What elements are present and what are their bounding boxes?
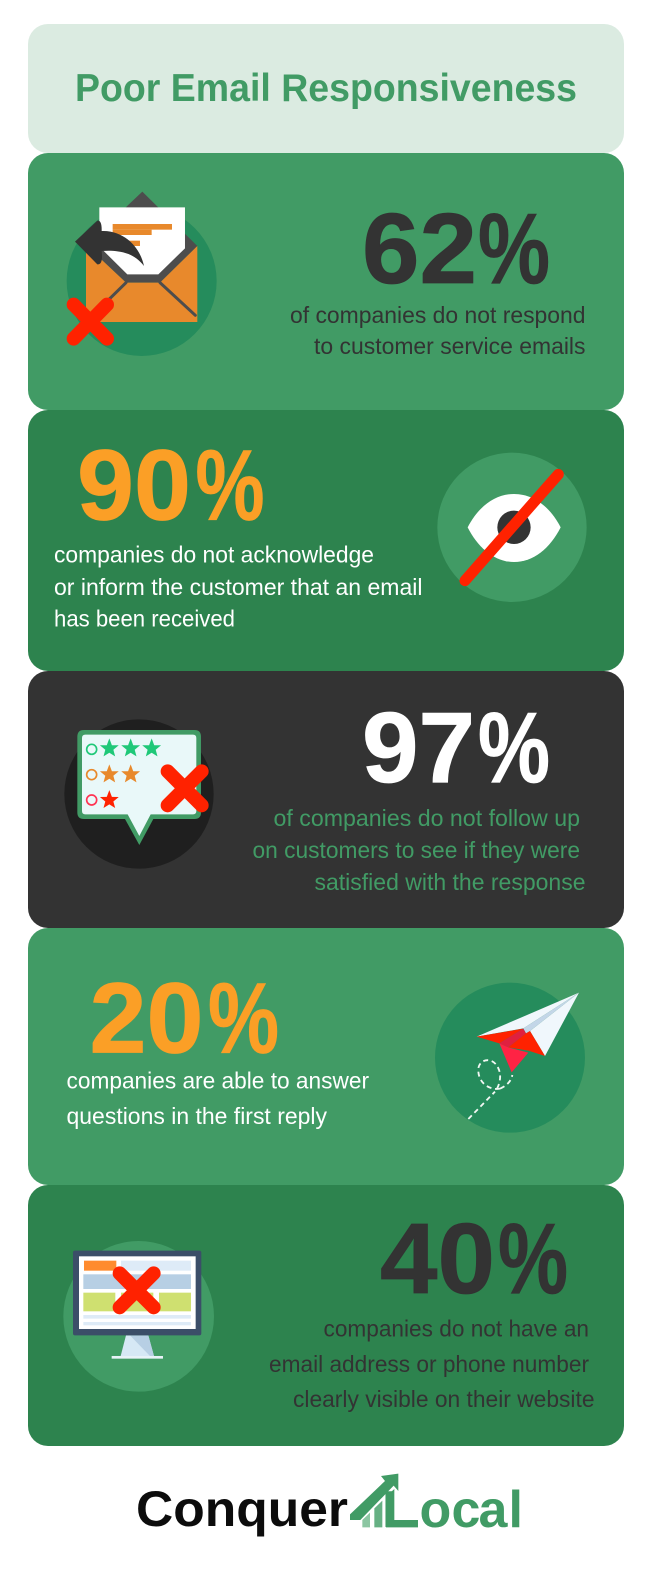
text: 90% description [54, 542, 422, 632]
text: 97% description: of companies do not follow up [274, 805, 580, 831]
stat: 62%: 62 [362, 193, 477, 305]
text: 20% description: companies are able to answer [66, 1068, 369, 1094]
stat: 97%: 97 [362, 692, 475, 804]
text: 97% description: on customers to see if they were [252, 837, 580, 863]
panel: 40% no contact details [28, 1185, 624, 1446]
text: 62% description [290, 302, 586, 359]
stat: 97%: % [478, 692, 550, 804]
stat: 90%: % [196, 430, 264, 542]
text: 62% description: to customer service emails [314, 333, 586, 359]
icon: envelope with reply arrow and cross [67, 192, 217, 356]
panel: 97% do not follow up [28, 671, 624, 928]
icon: rating speech bubble with cross [64, 719, 214, 869]
logo wordmark: Conquer: Conquer [136, 1481, 348, 1537]
stat: 20%: 20 [90, 962, 204, 1074]
text: 40% description [269, 1316, 594, 1412]
icon: crossed-out eye [437, 453, 587, 602]
panel: 90% do not acknowledge [28, 410, 624, 671]
text: 20% description: questions in the first reply [66, 1103, 327, 1129]
text: 97% description [252, 805, 586, 895]
stat: 90%: 90 [77, 430, 191, 542]
text: 90% description: or inform the customer that an email [54, 574, 422, 600]
logo: Conquer Local [136, 1474, 523, 1539]
text: 62% description: of companies do not respond [290, 302, 586, 328]
stat: 40%: 40 [380, 1203, 495, 1315]
title: Poor Email Responsiveness [75, 67, 577, 110]
logo mark: rising arrow and bars [350, 1474, 418, 1527]
panel: 62% do not respond [28, 153, 624, 410]
panel: 20% answer in first reply [28, 928, 624, 1185]
text: 40% description: email address or phone number [269, 1351, 589, 1377]
text: 97% description: satisfied with the response [314, 869, 586, 895]
icon: paper plane [435, 983, 585, 1133]
stat: 40%: % [498, 1203, 568, 1315]
icon: monitor with cross [63, 1241, 214, 1392]
text: 90% description: has been received [54, 606, 235, 632]
panel: title header [28, 24, 624, 153]
text: 90% description: companies do not acknowledge [54, 542, 374, 568]
text: 40% description: clearly visible on their website [293, 1386, 594, 1412]
text: 40% description: companies do not have an [324, 1316, 589, 1342]
stat: 62%: % [478, 193, 550, 305]
logo wordmark: Local: Local [382, 1481, 523, 1539]
text: 20% description [66, 1068, 369, 1129]
stat: 20%: % [208, 962, 279, 1074]
